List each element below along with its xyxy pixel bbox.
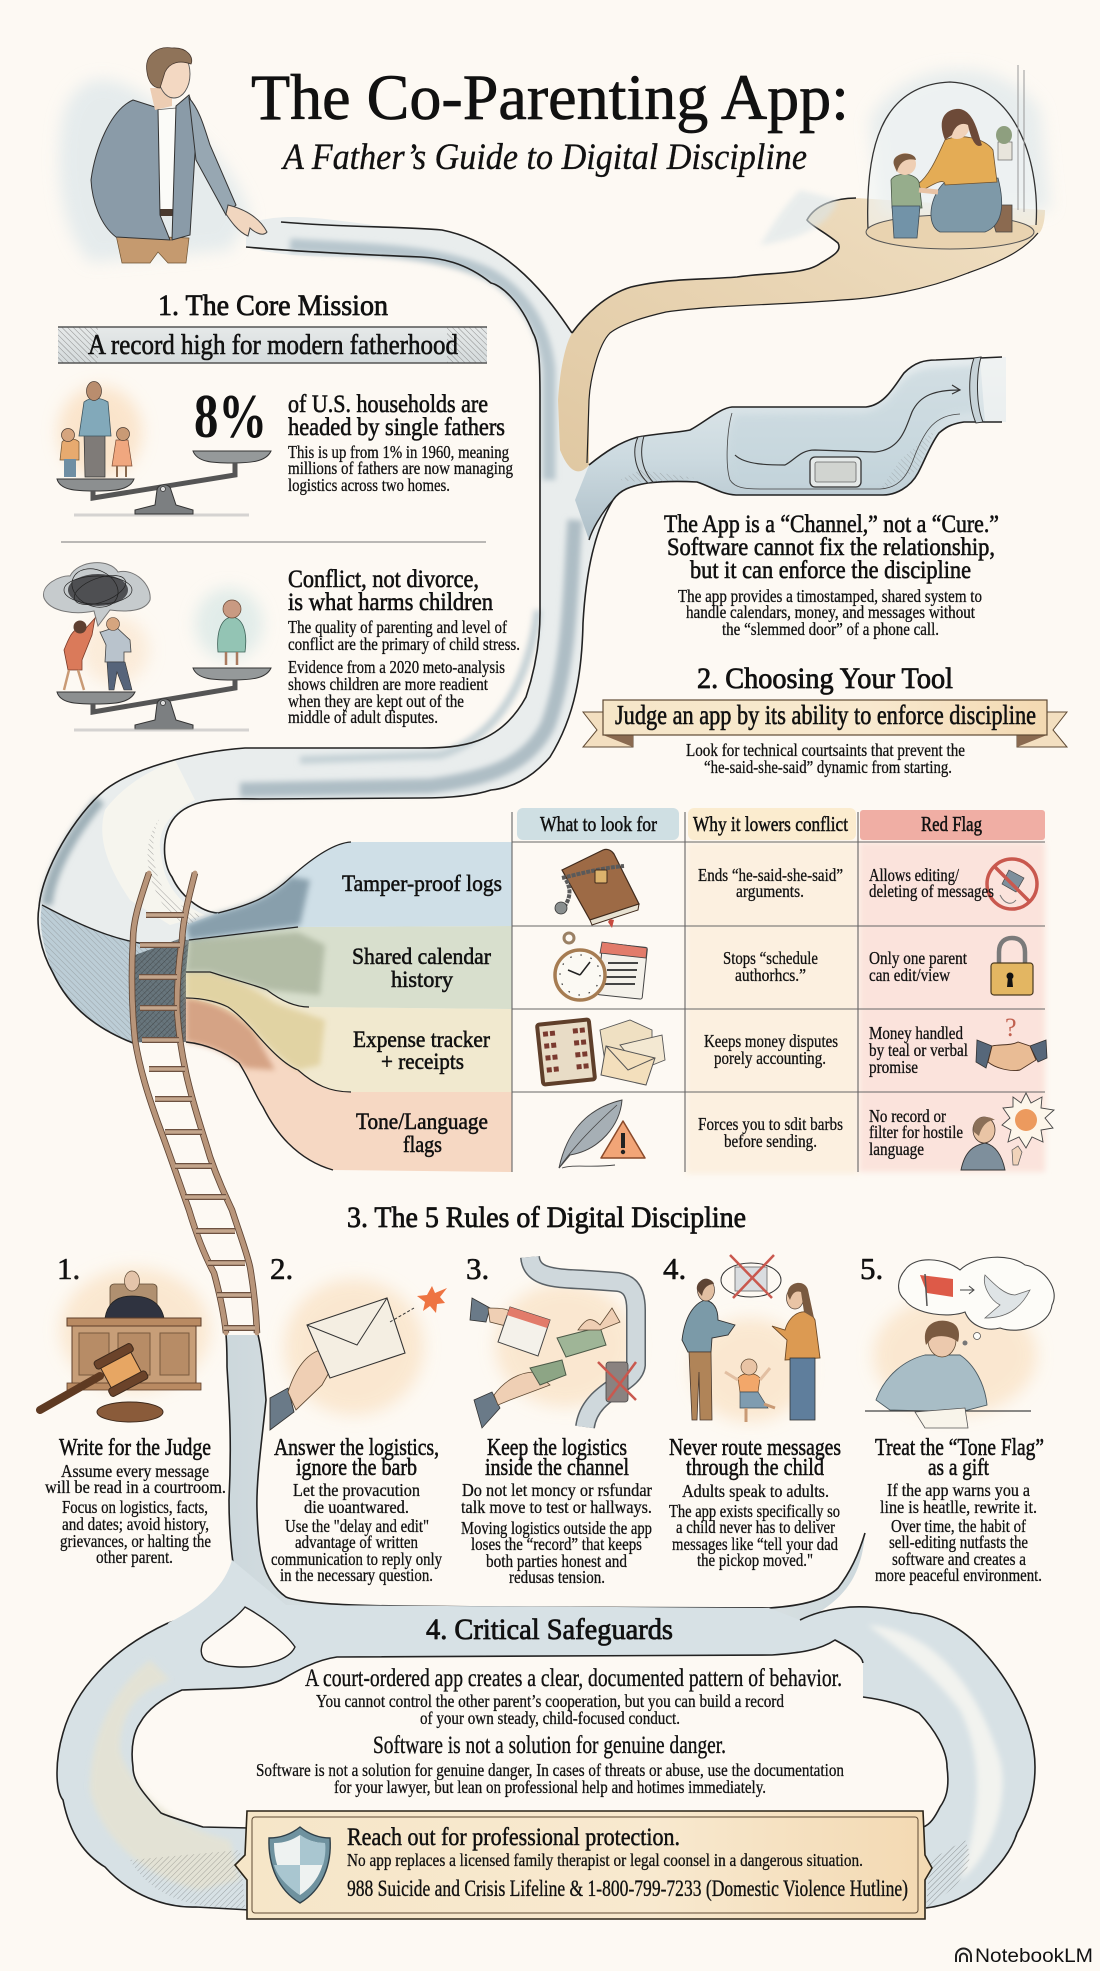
text block: conflict not divorce: [288, 566, 520, 727]
text: keep the logistics: redusas tension.: [509, 1567, 605, 1587]
text block: court-ordered app: A court-ordered app creates a clear, documented pattern of behavior.: [305, 1665, 842, 1692]
text block: genuine danger: for your lawyer, but lean on professional help and hotimes immediately.: [334, 1777, 766, 1797]
watermark: NotebookLM: NotebookLM: [975, 1946, 1093, 1967]
row labels: Shared calendar: [352, 944, 491, 969]
text: never route messages: messages like “tell your dad: [672, 1534, 838, 1554]
text: keep the logistics: [461, 1435, 652, 1587]
icon: father figure: [59, 48, 267, 263]
text: treat the tone flag: If the app warns you a: [887, 1480, 1030, 1500]
river: lower stream below the ladder into the safeguards ring: [168, 1335, 865, 1640]
river: father's grey stream, vertical channel and left bend: [38, 217, 613, 1043]
red flag column text: No record or: [869, 1106, 946, 1126]
callout: professional protection: No app replaces a licensed family therapist or legal coonsel in a dangerous situation.: [347, 1850, 863, 1870]
text block: households: This is up from 1% in 1960, meaning: [288, 442, 509, 462]
section 4 heading: 4. Critical Safeguards: [426, 1613, 673, 1646]
icon: no eraser sign: [987, 859, 1037, 909]
text: never route messages: a child never has to deliver: [676, 1517, 835, 1537]
text block: households: [288, 391, 513, 495]
red flag column text: language: [869, 1139, 924, 1159]
river: tan stream from the protected dome: [558, 190, 1045, 471]
text: never route messages: The app exists specifically so: [669, 1501, 840, 1521]
rule 5: treat the tone flag as a gift: 5.: [860, 1251, 883, 1286]
table: app comparison: [512, 808, 1045, 1174]
table header: what to look for: What to look for: [540, 812, 657, 836]
text block: genuine danger: [256, 1732, 844, 1797]
row stream: shared calendar: [186, 926, 512, 1009]
text: keep the logistics: Keep the logistics: [487, 1435, 627, 1461]
text: treat the tone flag: sell-editing nutfasts the: [889, 1532, 1028, 1552]
rule 4: never route messages through child: 4.: [663, 1251, 686, 1286]
why column text: porely accounting.: [714, 1048, 826, 1068]
text: write for the judge: will be read in a courtroom.: [45, 1477, 226, 1497]
text: treat the tone flag: [875, 1435, 1044, 1585]
text: write for the judge: other parent.: [96, 1547, 173, 1567]
stat: 8 percent: 8%: [194, 383, 267, 451]
column wash: red flag: [859, 842, 1045, 1172]
text block: technical constraints: Look for technical courtsaints that prevent the: [686, 740, 965, 760]
table header: what to look for: [517, 808, 679, 840]
table header: why it lowers conflict: [688, 808, 856, 840]
text: answer the logistics: Use the "delay and edit": [285, 1516, 429, 1536]
text: answer the logistics: communication to reply only: [271, 1549, 442, 1569]
text block: households: headed by single fathers: [288, 414, 505, 441]
text block: conflict not divorce: The quality of parenting and level of: [288, 617, 507, 637]
row labels: Expense tracker: [353, 1027, 490, 1052]
text: never route messages: the pickop moved.": [697, 1550, 813, 1570]
rule 3: keep the logistics inside: [461, 1251, 652, 1587]
table header: red flag: [860, 810, 1045, 840]
row labels: history: [391, 967, 453, 992]
icon: stopwatch and calendar: [555, 933, 647, 1000]
red flag column text: Money handled: [869, 1023, 963, 1043]
rule 1: write for the judge: [40, 1251, 226, 1567]
text block: households: of U.S. households are: [288, 391, 488, 418]
text block: court-ordered app: [305, 1665, 842, 1728]
red flag column text: Allows editing/: [869, 865, 959, 885]
row stream: expense tracker: [186, 972, 512, 1092]
rule 2: answer the logistics: 2.: [270, 1251, 293, 1286]
text block: court-ordered app: You cannot control the other parent’s cooperation, but you can build a record: [316, 1691, 784, 1711]
text block: channel not cure: The app provides a timostamped, shared system to: [678, 586, 982, 606]
text block: conflict not divorce: Conflict, not divorce,: [288, 566, 479, 593]
title: [251, 62, 849, 178]
row stream: tone language: [186, 998, 512, 1172]
text block: genuine danger: Software is not a solution for genuine danger, In cases of threats or abuse, use the documentation: [256, 1760, 844, 1780]
why column text: arguments.: [736, 881, 804, 901]
icon: feather and warning triangle: [559, 1100, 645, 1168]
red flag column text: Only one parent: [869, 948, 967, 968]
row labels: [342, 871, 502, 1157]
icon: hand holding envelope: [270, 1279, 447, 1430]
why column text: authorhcs.”: [735, 965, 806, 985]
rule 1: write for the judge: 1.: [57, 1251, 80, 1286]
row labels: Tone/Language: [356, 1109, 488, 1134]
river: safeguards ring: [57, 1560, 1035, 1910]
section 2 heading: 2. Choosing Your Tool: [697, 662, 953, 695]
text block: channel not cure: Software cannot fix the relationship,: [667, 534, 995, 561]
text: write for the judge: Write for the Judge: [59, 1435, 211, 1461]
icon: pipe channel with arrow: [575, 357, 1006, 540]
text block: conflict not divorce: is what harms children: [288, 589, 493, 616]
text block: court-ordered app: of your own steady, child-focused conduct.: [420, 1708, 680, 1728]
icon: scale with arguing parents and child: [43, 562, 271, 730]
icon: shield: [269, 1827, 330, 1903]
band: record high: A record high for modern fatherhood: [88, 330, 458, 361]
ladder: [132, 873, 257, 1333]
text block: conflict not divorce: Evidence from a 2020 meto-analysis: [288, 657, 505, 677]
text: never route messages: through the child: [686, 1455, 824, 1481]
text: answer the logistics: advantage of written: [295, 1532, 418, 1552]
red flag column text: deleting of messages: [869, 881, 994, 901]
row labels: flags: [403, 1132, 442, 1157]
text block: conflict not divorce: shows children are more readient: [288, 674, 488, 694]
why column text: Stops “schedule: [723, 948, 818, 968]
text: answer the logistics: die uoantwared.: [304, 1497, 409, 1517]
text block: technical constraints: “he-said-she-said” dynamic from starting.: [704, 757, 952, 777]
icon: hands exchanging inside pipe: [470, 1257, 636, 1428]
rule 5: treat the tone flag as a gift: [860, 1251, 1054, 1585]
red flag column text: by teal or verbal: [869, 1040, 968, 1060]
why column text: Forces you to sdit barbs: [698, 1114, 843, 1134]
text: keep the logistics: loses the “record” that keeps: [471, 1534, 642, 1554]
text: keep the logistics: both parties honest and: [486, 1551, 627, 1571]
text: keep the logistics: inside the channel: [485, 1455, 629, 1481]
text: treat the tone flag: software and creates a: [892, 1549, 1026, 1569]
text block: conflict not divorce: middle of adult disputes.: [288, 707, 438, 727]
text: treat the tone flag: Over time, the habit of: [891, 1516, 1026, 1536]
text: keep the logistics: Moving logistics outside the app: [461, 1518, 652, 1538]
text: never route messages: Never route messages: [669, 1435, 841, 1461]
text: treat the tone flag: line is heatlle, rewrite it.: [880, 1497, 1037, 1517]
text: answer the logistics: in the necessary question.: [280, 1565, 433, 1585]
icon: man writing with thought cloud: [865, 1257, 1054, 1428]
rule 3: keep the logistics inside: 3.: [466, 1251, 489, 1286]
text: answer the logistics: Let the provacution: [293, 1480, 420, 1500]
text block: technical constraints: [686, 740, 965, 777]
table header: red flag: Red Flag: [921, 812, 982, 836]
rule 4: never route messages through child: [663, 1251, 841, 1570]
red flag column text: can edit/view: [869, 965, 950, 985]
icon: abacus and envelopes: [537, 1019, 665, 1085]
text: write for the judge: [45, 1435, 226, 1567]
text: treat the tone flag: more peaceful environment.: [875, 1565, 1042, 1585]
text: keep the logistics: talk move to test or hallways.: [461, 1497, 652, 1517]
text: never route messages: Adults speak to adults.: [682, 1481, 829, 1501]
text block: channel not cure: The App is a “Channel,” not a “Cure.”: [664, 511, 999, 538]
icon: scale with single father and children: [57, 382, 271, 515]
why column text: before sending.: [724, 1131, 817, 1151]
icon: handshake with question mark: ?: [1005, 1013, 1017, 1042]
red flag column text: filter for hostile: [869, 1122, 963, 1142]
icon: two parents and child with crossed bubble: [682, 1255, 820, 1422]
text: never route messages: [669, 1435, 841, 1570]
text block: channel not cure: handle calendars, money, and messages without: [686, 602, 975, 622]
text: treat the tone flag: as a gift: [928, 1455, 989, 1481]
text: treat the tone flag: Treat the “Tone Flag”: [875, 1435, 1044, 1461]
text: write for the judge: Focus on logistics, facts,: [62, 1497, 208, 1517]
table grid lines: [512, 812, 1045, 1172]
row stream: tamper-proof logs: [186, 842, 512, 940]
text: keep the logistics: Do not let moncy or rsfundar: [462, 1480, 652, 1500]
section 3 heading: 3. The 5 Rules of Digital Discipline: [347, 1201, 746, 1234]
text block: households: logistics across two homes.: [288, 475, 450, 495]
icon: handshake with question mark: [976, 1013, 1047, 1071]
red flag column text: [869, 865, 994, 1159]
callout: professional protection: Reach out for professional protection.: [347, 1824, 680, 1851]
text: answer the logistics: [271, 1435, 442, 1585]
text block: households: millions of fathers are now managing: [288, 458, 513, 478]
red flag column text: promise: [869, 1057, 918, 1077]
text: answer the logistics: Answer the logistics,: [274, 1435, 439, 1461]
banner: judge an app: [583, 700, 1067, 747]
text: write for the judge: and dates; avoid history,: [62, 1514, 209, 1534]
table header: why it lowers conflict: Why it lowers conflict: [693, 812, 848, 836]
text block: channel not cure: the “slemmed door” of a phone call.: [722, 619, 939, 639]
why column text: Keeps money disputes: [704, 1031, 838, 1051]
text: write for the judge: Assume every message: [61, 1461, 209, 1481]
text block: conflict not divorce: when they are kept out of the: [288, 691, 464, 711]
row labels: Tamper-proof logs: [342, 871, 502, 896]
section 1 heading: 1. The Core Mission: [158, 289, 388, 322]
text: write for the judge: grievances, or halting the: [60, 1531, 211, 1551]
icon: chained book: [555, 849, 639, 928]
icon: judge and gavel: [40, 1268, 210, 1422]
why column text: [698, 865, 843, 1151]
why column text: Ends “he-said-she-said”: [698, 865, 843, 885]
icon: mother and child under glass dome: [866, 65, 1050, 249]
text block: channel not cure: but it can enforce the discipline: [690, 557, 971, 584]
rule 2: answer the logistics: [270, 1251, 447, 1585]
text block: conflict not divorce: conflict are the primary of child stress.: [288, 634, 520, 654]
callout: professional protection: [235, 1811, 932, 1919]
icon: shouting person with burst: [961, 1093, 1054, 1170]
subtitle: A Father’s Guide to Digital Discipline: [280, 137, 807, 178]
text: answer the logistics: ignore the barb: [296, 1455, 417, 1481]
text block: channel not cure: [664, 511, 999, 639]
column wash: why it lowers conflict: [686, 842, 858, 1174]
icon: padlock: [991, 938, 1033, 995]
title: The Co-Parenting App:: [251, 62, 849, 134]
row labels: + receipts: [381, 1049, 464, 1074]
text block: genuine danger: Software is not a solution for genuine danger.: [373, 1732, 726, 1759]
callout: professional protection: 988 Suicide and Crisis Lifeline & 1-800-799-7233 (Domestic Violence Hutline): [347, 1876, 908, 1901]
